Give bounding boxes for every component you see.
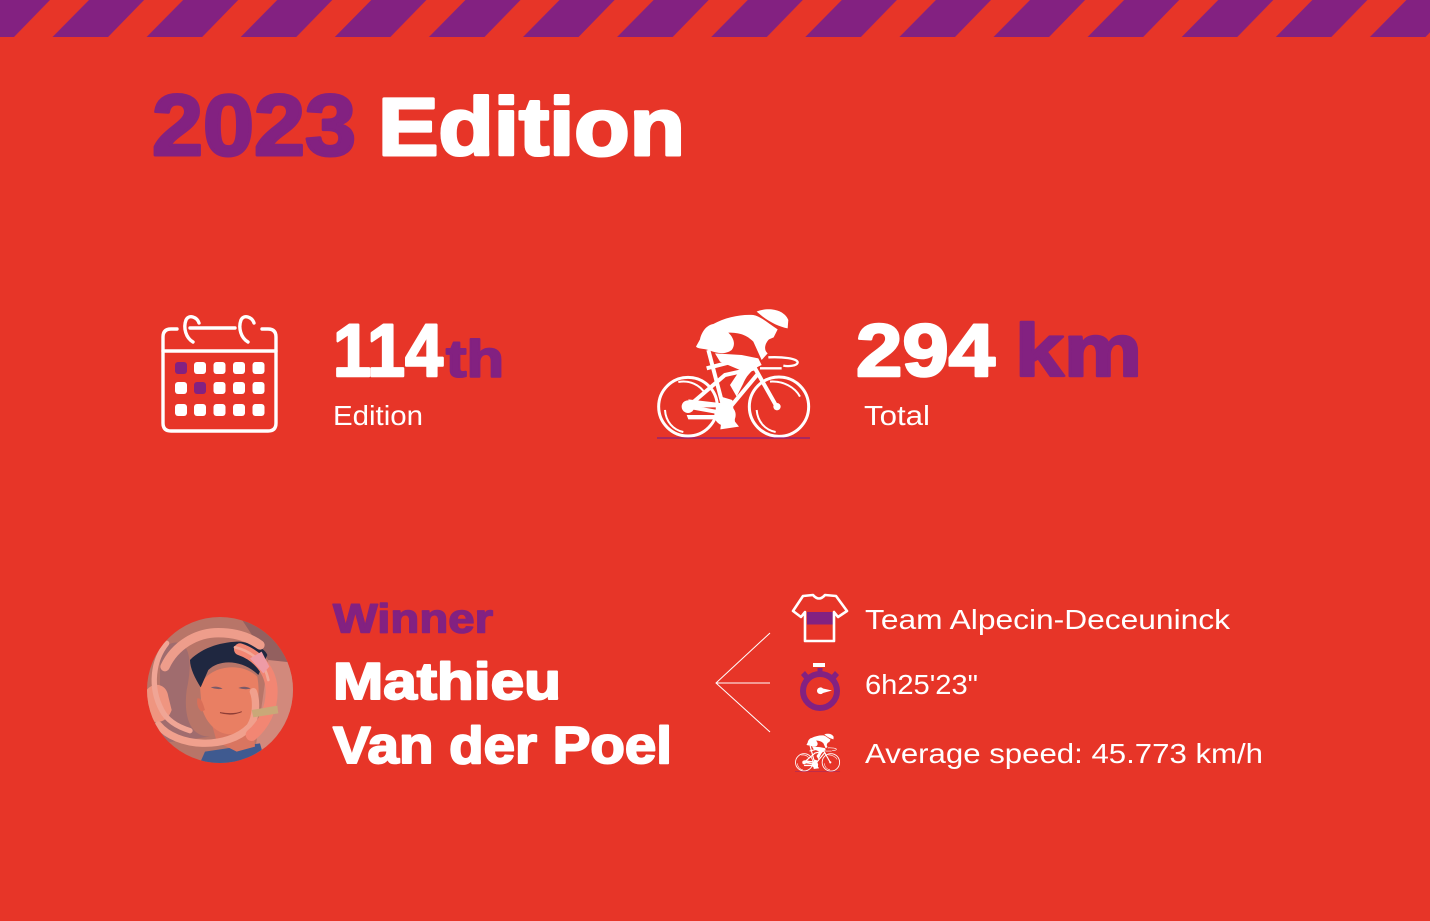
icon: stopwatch <box>801 663 839 708</box>
winner name: Van der Poel <box>333 717 672 775</box>
striped top band <box>0 0 1430 37</box>
stat: 294 km total: km <box>1015 309 1142 392</box>
title: 2023 <box>152 78 356 174</box>
icon: small cyclist <box>795 734 840 772</box>
speed text: Average speed: 45.773 km/h <box>865 738 1263 769</box>
winner name: Mathieu <box>333 653 561 711</box>
time text: 6h25'23" <box>865 669 978 700</box>
stat: 294 km total <box>856 309 1142 431</box>
stat: 294 km total: 294 <box>856 309 995 392</box>
winner name: Winner <box>333 596 493 642</box>
icon: jersey <box>793 595 847 641</box>
icon: calendar <box>163 317 276 431</box>
team text: Team Alpecin-Deceuninck <box>865 604 1231 635</box>
arrow: branching lines <box>716 633 770 732</box>
title: Edition <box>378 82 685 173</box>
winner name <box>333 596 672 775</box>
stat: 294 km total: Total <box>864 400 930 431</box>
stat: 114th edition <box>333 309 504 431</box>
stat: 114th edition: th <box>446 330 504 388</box>
stat: 114th edition: 114 <box>333 309 443 392</box>
stat: 114th edition: Edition <box>333 400 423 431</box>
icon: cyclist <box>657 309 810 438</box>
title <box>152 78 685 174</box>
winner photo <box>147 617 293 763</box>
